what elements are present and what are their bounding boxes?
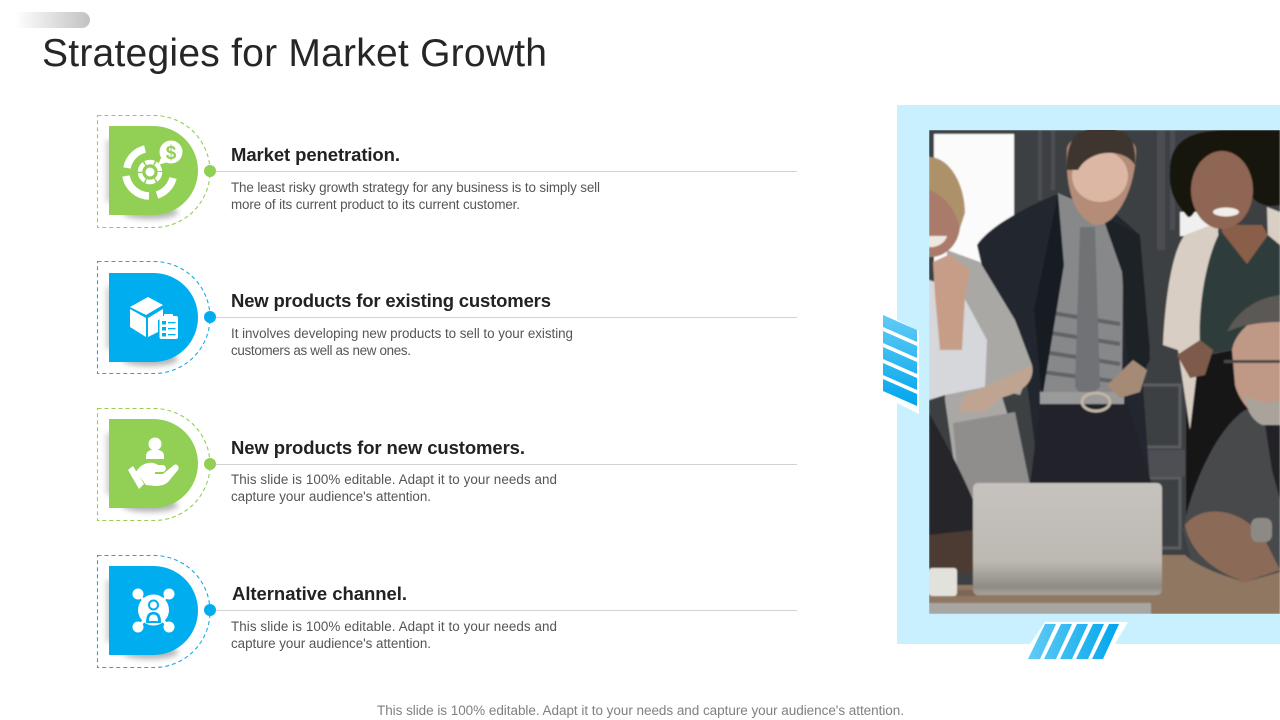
left striped accent [883,313,919,414]
description: This slide is 100% editable. Adapt it to your needs and [231,619,557,634]
footer note: This slide is 100% editable. Adapt it to your needs and capture your audience's attention. [377,703,904,718]
connector dot [204,458,216,470]
description: more of its current product to its current customer. [231,197,520,212]
strategy 3: new products for new customers [98,408,797,520]
bottom striped accent [1028,622,1128,659]
heading: Market penetration. [231,144,400,165]
connector line [216,464,797,465]
green badge [109,126,198,215]
icon: dollar chart: $ [166,143,177,164]
connector line [216,317,797,318]
decorative title pill [15,12,90,28]
right woman top and blazer [1186,350,1248,514]
wall panels [1038,130,1175,250]
badge outline [98,116,210,228]
badge outline [98,408,210,520]
window [934,134,1014,284]
badge shadow [106,287,178,366]
left woman [945,250,1032,470]
right man suit [1184,409,1280,573]
description: customers as well as new ones. [231,343,411,358]
description: capture your audience's attention. [231,489,431,504]
green badge [109,419,198,508]
description [231,326,573,358]
right man head [1230,321,1280,408]
seated person at left [929,413,973,540]
heading: Alternative channel. [232,583,407,604]
strategy 1: market penetration [98,116,797,228]
badge outline [98,262,210,374]
blue badge [109,273,198,362]
title: Strategies for Market Growth [42,32,547,75]
description [231,472,557,504]
connector dot [204,165,216,177]
badge shadow [106,433,178,512]
description: The least risky growth strategy for any business is to simply sell [231,180,600,195]
badge shadow [106,140,178,219]
icon: dollar chart [126,140,182,196]
table [929,555,1280,614]
description: capture your audience's attention. [231,636,431,651]
blue badge [109,566,198,655]
connector line [216,171,797,172]
description [231,180,600,212]
photo: business team around a laptop [929,128,1280,614]
connector line [216,610,797,611]
icon: hand holding person [128,438,179,489]
centre man head [1067,134,1136,225]
badge shadow [106,580,178,659]
connector dot [204,311,216,323]
strategy 2: new products for existing customers [98,262,797,374]
heading: New products for new customers. [231,437,525,458]
strategy 4: alternative channel [98,556,797,668]
right man hands [1185,511,1280,582]
right woman head [1170,130,1280,217]
light blue photo panel [897,105,1280,644]
icon: network of people [132,588,174,632]
connector dot [204,604,216,616]
badge outline [98,556,210,668]
description [231,619,557,651]
description: This slide is 100% editable. Adapt it to your needs and [231,472,557,487]
laptop [973,483,1162,595]
icon: box and checklist [130,297,178,339]
centre man suit [977,193,1150,485]
description: It involves developing new products to sell to your existing [231,326,573,341]
heading: New products for existing customers [231,290,551,311]
